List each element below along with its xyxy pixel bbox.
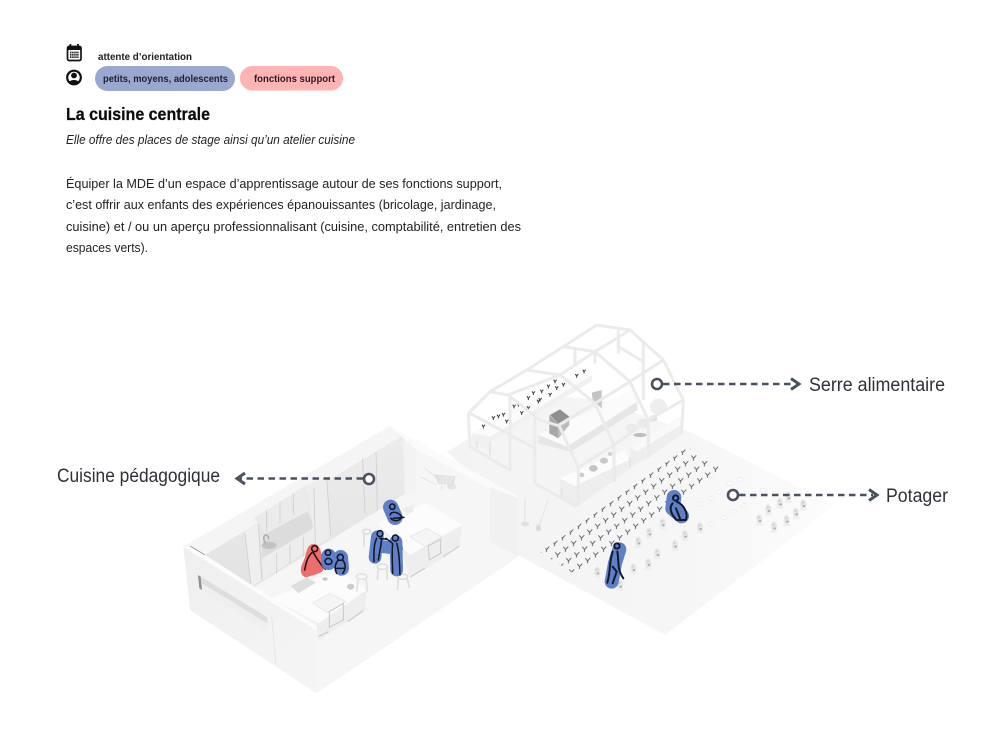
- subtitle: Elle offre des places de stage ainsi qu’un atelier cuisine: [66, 132, 355, 147]
- greenhouse tables: [472, 368, 682, 507]
- arrow: potager: [728, 490, 877, 500]
- garden tools: [521, 498, 548, 531]
- panel: greenhouse: [468, 325, 683, 507]
- person: child seated at island: [390, 504, 404, 521]
- body text: espaces verts).: [66, 240, 148, 255]
- person: gardener walking: [607, 543, 623, 583]
- wheelbarrow: [420, 468, 456, 490]
- callout: potager: Potager: [886, 486, 949, 507]
- panel: kitchen: [183, 426, 518, 693]
- stool: [356, 574, 367, 592]
- back wall: [205, 435, 405, 587]
- seedlings on back table: [482, 370, 586, 428]
- side wall end: [403, 435, 416, 494]
- front wall: [183, 545, 317, 693]
- icon: user: [67, 71, 81, 85]
- callout: cuisine pédagogique: Cuisine pédagogique: [57, 466, 220, 487]
- panel: garden ground: [447, 395, 835, 635]
- tag: support: [240, 66, 343, 90]
- schedule label: attente d’orientation: [98, 51, 192, 63]
- body text: cuisine) et / ou un aperçu professionnalisant (cuisine, comptabilité, entretien des: [66, 219, 521, 234]
- callout: potager: [728, 486, 949, 507]
- callout: serre alimentaire: [652, 375, 945, 396]
- back wall outer top: [183, 426, 420, 555]
- stools: [363, 529, 409, 590]
- icon: calendar: [68, 44, 81, 60]
- header tags: [67, 44, 343, 91]
- person: staff member in red: [301, 544, 325, 577]
- title: La cuisine centrale: [66, 104, 210, 124]
- body text: Équiper la MDE d’un espace d’apprentissage autour de ses fonctions support,: [66, 176, 502, 191]
- body text: [66, 176, 521, 255]
- garden plants: [521, 477, 807, 591]
- island two: [377, 503, 462, 578]
- person: two children at island: [325, 550, 345, 573]
- tag: audience: [95, 66, 235, 91]
- greenhouse frame: [468, 325, 683, 507]
- grey appliance: [549, 390, 602, 438]
- person: gardener crouching: [671, 495, 687, 520]
- tag: support: fonctions support: [254, 73, 335, 85]
- callout: cuisine pédagogique: [57, 466, 374, 487]
- stones: [696, 477, 766, 526]
- bushes: [593, 492, 807, 591]
- arrow: cuisine: [237, 473, 374, 484]
- panel: plant rows: [540, 447, 724, 575]
- kitchen floor: [253, 448, 518, 693]
- tag: audience: petits, moyens, adolescents: [103, 73, 228, 85]
- body text: c’est offrir aux enfants des expériences épanouissantes (bricolage, jardinage,: [66, 197, 496, 212]
- cabinets and sink: [245, 452, 377, 587]
- plants on tables: [579, 399, 667, 477]
- arrow: serre: [652, 378, 799, 390]
- person: adult and child standing: [374, 531, 400, 575]
- right wall band and end: [390, 426, 518, 557]
- island one: [272, 570, 367, 641]
- callout: serre alimentaire: Serre alimentaire: [809, 375, 945, 396]
